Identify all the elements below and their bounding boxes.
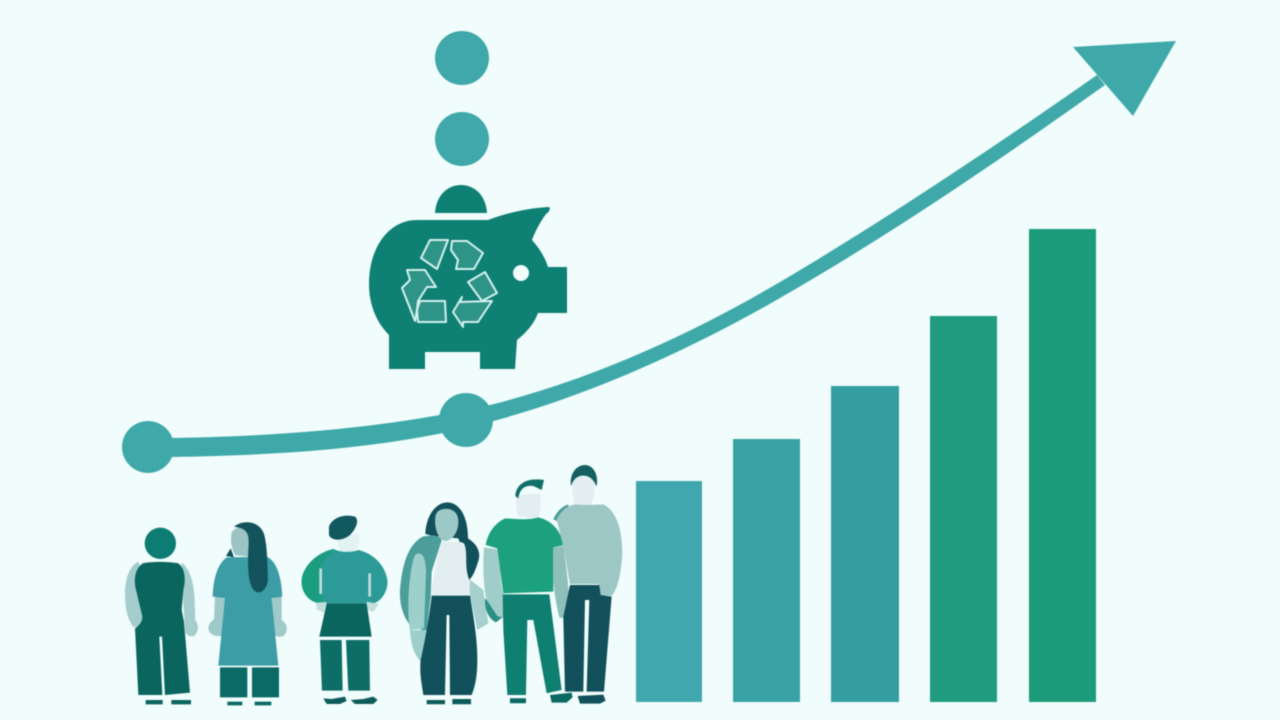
person 3 <box>302 516 387 704</box>
bar 4 <box>930 316 997 702</box>
person 2 <box>208 522 287 705</box>
curve marker: start <box>122 421 174 473</box>
person 6 <box>553 465 622 704</box>
icon: falling coins <box>435 31 489 166</box>
bar 3 <box>831 386 899 702</box>
person 4 <box>400 502 488 704</box>
icon: piggy bank with recycling symbol <box>369 185 567 369</box>
person 5 <box>483 479 573 703</box>
bar 2 <box>733 439 800 702</box>
arrowhead <box>1073 41 1176 116</box>
curve marker: midpoint <box>439 393 493 447</box>
person 1 <box>125 528 198 704</box>
bar 1 <box>636 481 702 702</box>
bar 5 <box>1029 229 1096 702</box>
bar chart <box>636 229 1096 702</box>
growth arrow curve <box>122 41 1176 473</box>
people: group of six <box>125 465 622 705</box>
